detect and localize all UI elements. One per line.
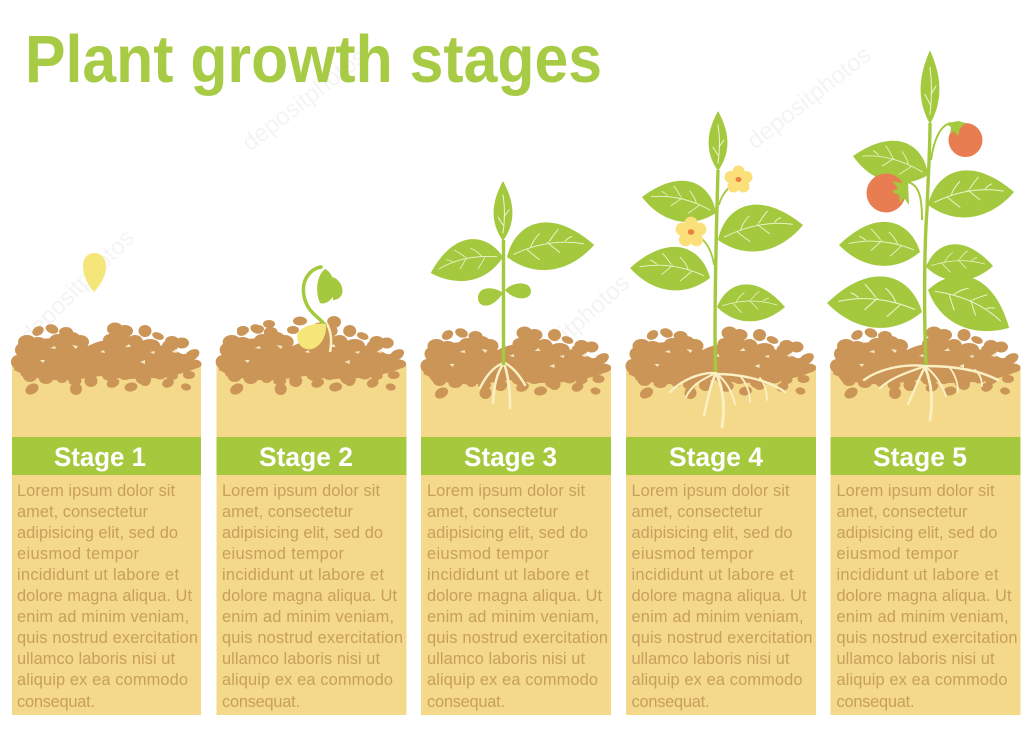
- soil body: [830, 365, 1020, 715]
- watermarks: depositphotos: [15, 224, 140, 349]
- stage 4 text: aliquip ex ea commodo: [632, 671, 802, 689]
- panel: stage 2: [216, 267, 406, 715]
- stage 2 text: [222, 482, 403, 711]
- stage 2 text: eiusmod tempor: [222, 545, 345, 563]
- stage 5 text: Lorem ipsum dolor sit: [836, 482, 995, 500]
- icon: seedling: [425, 181, 597, 365]
- stage 2 text: aliquip ex ea commodo: [222, 671, 393, 689]
- watermarks: depositphotos: [506, 269, 635, 389]
- stage 4 text: consequat.: [632, 693, 710, 711]
- stage 5 text: amet, consectetur: [836, 503, 968, 521]
- icon: tomato: [866, 174, 909, 212]
- stage 3 text: enim ad minim veniam,: [427, 608, 599, 626]
- stage 3 text: ullamco laboris nisi ut: [427, 650, 585, 668]
- stage 1 text: quis nostrud exercitation: [17, 629, 198, 647]
- stage 2 heading: Stage 2: [259, 442, 353, 472]
- stage 4 text: Lorem ipsum dolor sit: [632, 482, 790, 500]
- stage 2 text: adipisicing elit, sed do: [222, 524, 383, 542]
- stage 3 text: [427, 482, 608, 711]
- stage 1 label bar: [12, 437, 201, 475]
- stage 5 text: enim ad minim veniam,: [836, 608, 1008, 626]
- stage 4 heading: Stage 4: [669, 442, 763, 472]
- stage 4 text: [632, 482, 812, 711]
- watermarks: depositphotos: [237, 43, 371, 157]
- soil body: [626, 365, 816, 715]
- stage 3 text: dolore magna aliqua. Ut: [427, 587, 602, 605]
- stage 3 text: amet, consectetur: [427, 503, 559, 521]
- stage 5 text: [836, 482, 1018, 711]
- stage 3 text: adipisicing elit, sed do: [427, 524, 588, 542]
- soil pebbles: [626, 326, 816, 401]
- stage 5 text: quis nostrud exercitation: [836, 629, 1018, 647]
- soil body: [216, 365, 406, 715]
- stage 2 text: ullamco laboris nisi ut: [222, 650, 380, 668]
- stage 3 text: consequat.: [427, 693, 505, 711]
- stage 1 text: eiusmod tempor: [17, 545, 140, 563]
- stage 2 label bar: [216, 437, 406, 475]
- roots: [480, 363, 525, 408]
- stage 1 text: ullamco laboris nisi ut: [17, 650, 175, 668]
- soil pebbles: [216, 322, 406, 397]
- stage 1 text: adipisicing elit, sed do: [17, 524, 178, 542]
- stage 2 text: Lorem ipsum dolor sit: [222, 482, 380, 500]
- roots: [670, 373, 785, 427]
- stage 2 text: amet, consectetur: [222, 503, 354, 521]
- roots: [864, 366, 998, 420]
- panel: stage 4: [626, 111, 816, 715]
- icon: sprout: [297, 267, 343, 352]
- icon: flowering plant: [628, 111, 806, 372]
- stage 1 text: consequat.: [17, 693, 95, 711]
- icon: flower: [676, 217, 706, 246]
- stage 2 text: dolore magna aliqua. Ut: [222, 587, 397, 605]
- icon: tomato: [946, 121, 982, 157]
- stage 1 text: amet, consectetur: [17, 503, 149, 521]
- stage 1 text: enim ad minim veniam,: [17, 608, 189, 626]
- icon: flower: [724, 166, 752, 192]
- soil pebbles: [11, 322, 202, 397]
- stage 1 heading: Stage 1: [54, 442, 146, 472]
- stage 3 text: Lorem ipsum dolor sit: [427, 482, 585, 500]
- stage 3 heading: Stage 3: [464, 442, 557, 472]
- watermarks: depositphotos: [742, 41, 876, 155]
- stage 1 text: [17, 482, 198, 711]
- stage 5 heading: Stage 5: [873, 442, 967, 472]
- stage 4 text: quis nostrud exercitation: [632, 629, 812, 647]
- soil body: [12, 365, 201, 715]
- stage 5 text: eiusmod tempor: [836, 545, 959, 563]
- icon: seed: [83, 253, 106, 292]
- stage 2 text: consequat.: [222, 693, 300, 711]
- stage 4 text: ullamco laboris nisi ut: [632, 650, 790, 668]
- watermarks: [15, 41, 876, 389]
- stage 2 text: quis nostrud exercitation: [222, 629, 403, 647]
- stage 2 text: enim ad minim veniam,: [222, 608, 394, 626]
- panel: stage 1: [11, 253, 202, 715]
- title: Plant growth stages: [25, 22, 602, 97]
- stage 3 text: quis nostrud exercitation: [427, 629, 608, 647]
- stage 5 label bar: [830, 437, 1020, 475]
- stage 3 text: incididunt ut labore et: [427, 566, 589, 584]
- stage 4 text: incididunt ut labore et: [632, 566, 794, 584]
- soil pebbles: [420, 326, 611, 401]
- stage 1 text: incididunt ut labore et: [17, 566, 179, 584]
- stage 4 label bar: [626, 437, 816, 475]
- soil pebbles: [830, 326, 1020, 401]
- stage 1 text: Lorem ipsum dolor sit: [17, 482, 175, 500]
- stage 3 text: eiusmod tempor: [427, 545, 550, 563]
- stage 1 text: aliquip ex ea commodo: [17, 671, 188, 689]
- soil body: [421, 365, 611, 715]
- stage 4 text: eiusmod tempor: [632, 545, 754, 563]
- stage 5 text: consequat.: [836, 693, 914, 711]
- stage 4 text: amet, consectetur: [632, 503, 763, 521]
- stage 3 text: aliquip ex ea commodo: [427, 671, 598, 689]
- extra pebbles: [237, 316, 341, 334]
- stage 5 text: ullamco laboris nisi ut: [836, 650, 995, 668]
- stage 3 label bar: [421, 437, 611, 475]
- stage 5 text: adipisicing elit, sed do: [836, 524, 998, 542]
- stage 1 text: dolore magna aliqua. Ut: [17, 587, 192, 605]
- stage 4 text: adipisicing elit, sed do: [632, 524, 792, 542]
- panel: stage 3: [420, 181, 611, 715]
- stage 5 text: incididunt ut labore et: [836, 566, 999, 584]
- stage 5 text: aliquip ex ea commodo: [836, 671, 1008, 689]
- stage 5 text: dolore magna aliqua. Ut: [836, 587, 1012, 605]
- stage 4 text: enim ad minim veniam,: [632, 608, 804, 626]
- panel: stage 5: [825, 50, 1022, 715]
- stage 2 text: incididunt ut labore et: [222, 566, 384, 584]
- stage 4 text: dolore magna aliqua. Ut: [632, 587, 807, 605]
- icon: fruiting plant: [825, 50, 1022, 365]
